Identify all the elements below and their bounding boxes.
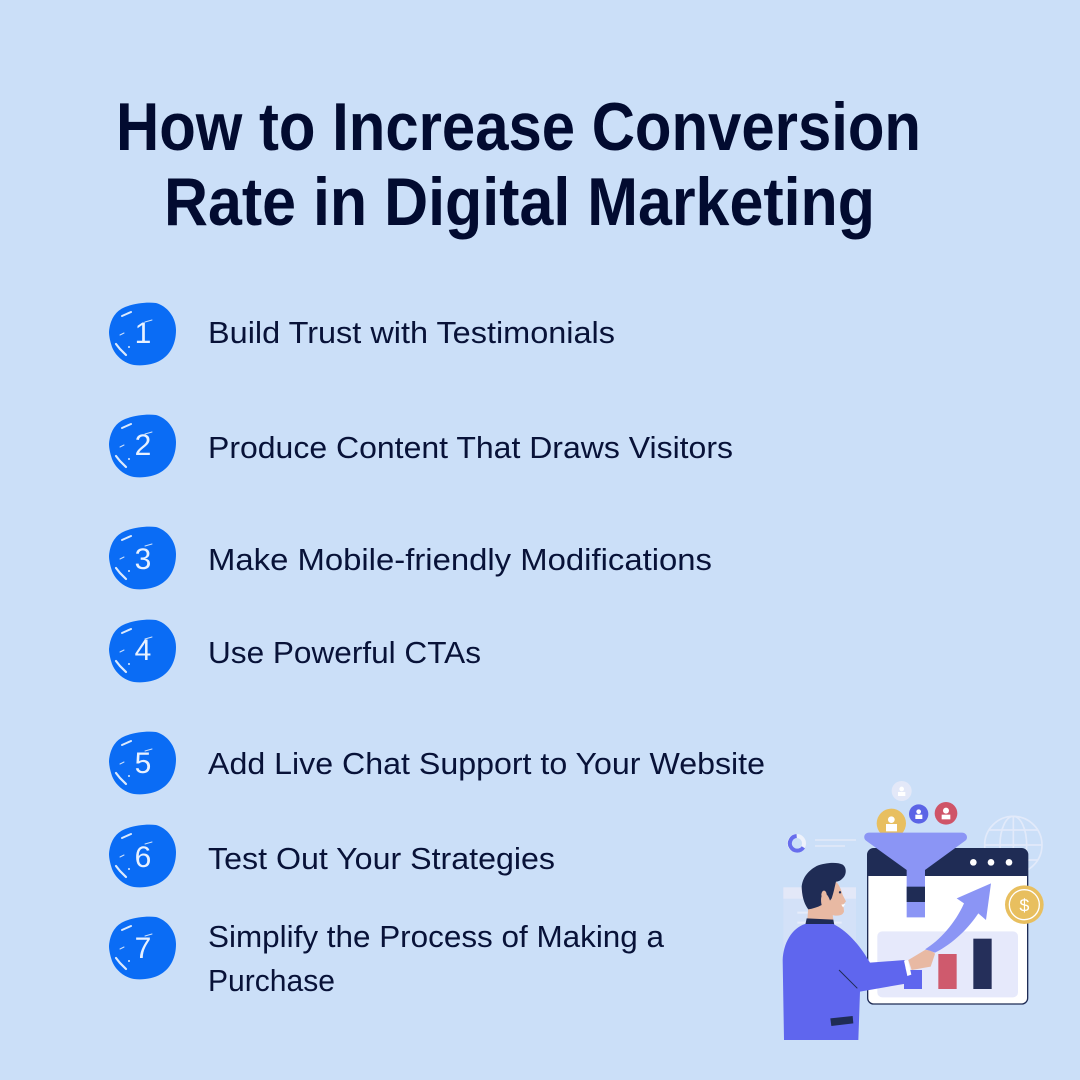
illustration: conversion funnel with presenter — [783, 781, 1044, 1040]
icon: faint donut and lines — [789, 836, 856, 851]
icon: dollar coin — [1005, 885, 1044, 924]
growth arrow — [925, 883, 991, 953]
list item 7 — [109, 917, 665, 998]
list item 1 — [109, 303, 615, 365]
list item 1: Build Trust with Testimonials — [208, 315, 615, 350]
list item 5: 5 — [135, 747, 151, 780]
list item 7: 7 — [135, 932, 151, 965]
icon: faint globe — [985, 816, 1042, 874]
funnel — [864, 833, 967, 917]
list item 3: 3 — [135, 543, 151, 576]
list item 6 — [109, 825, 555, 887]
cuff — [904, 960, 911, 976]
presenter — [783, 863, 935, 1040]
list item 6: Test Out Your Strategies — [208, 841, 555, 876]
collar — [805, 918, 834, 925]
bar chart — [877, 931, 1018, 997]
browser window — [868, 849, 1028, 1004]
list item 2: 2 — [135, 429, 151, 462]
icon: dollar coin: $ — [1019, 895, 1029, 915]
title: Rate in Digital Marketing — [164, 164, 875, 240]
list item 6: 6 — [135, 841, 151, 874]
face — [817, 882, 846, 916]
pocket — [830, 1016, 853, 1026]
hand — [908, 950, 935, 970]
list item 5 — [109, 732, 765, 794]
eye — [839, 891, 841, 893]
list item 2: Produce Content That Draws Visitors — [208, 430, 733, 465]
faint document behind presenter — [783, 887, 856, 964]
list item 5: Add Live Chat Support to Your Website — [208, 746, 765, 781]
user icons — [877, 781, 957, 838]
ear — [821, 891, 827, 899]
jacket — [783, 924, 907, 1040]
list item 7: Simplify the Process of Making a — [208, 919, 665, 954]
smile — [841, 904, 845, 907]
list item 4 — [109, 620, 481, 682]
list item 3: Make Mobile-friendly Modifications — [208, 542, 712, 577]
list item 7: Purchase — [208, 963, 335, 998]
title: How to Increase Conversion — [116, 89, 921, 165]
neck — [807, 907, 833, 920]
list item 4: 4 — [135, 634, 151, 667]
hair — [802, 863, 846, 909]
sleeve fold — [839, 970, 857, 988]
list item 3 — [109, 527, 712, 589]
list item 1: 1 — [135, 317, 151, 350]
title — [116, 89, 921, 240]
list item 4: Use Powerful CTAs — [208, 635, 481, 670]
list item 2 — [109, 415, 733, 477]
